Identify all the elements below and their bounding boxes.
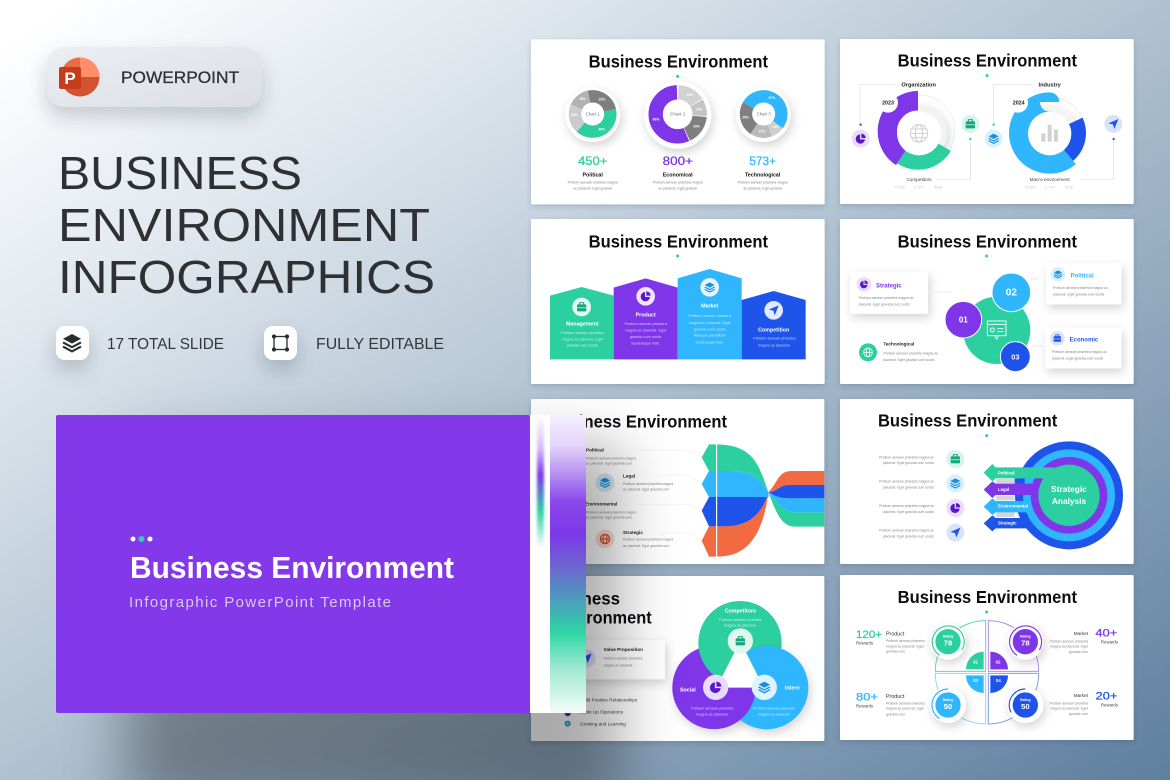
stat: political: 450+ — [578, 154, 607, 168]
stat: 80+ product: 80+ — [856, 692, 878, 704]
diagram: venn circles: Intern — [785, 686, 800, 692]
list: flow labels — [585, 448, 673, 548]
label: competitors: Competitors — [906, 177, 932, 182]
stat: economical — [653, 154, 703, 191]
slide 2: organization and industry donuts — [840, 39, 1134, 204]
donut: organization 2023 — [878, 83, 955, 166]
chart 3 — [736, 87, 791, 142]
rating 78 purple — [1007, 624, 1043, 660]
quadrant wedges: 02 — [996, 660, 1001, 665]
stat: economical: ac placerat. Eget gravida — [658, 187, 697, 191]
stat: 40+ market: Pretium aenean pharetra — [1049, 639, 1088, 643]
quadrant wedges: 04 — [996, 678, 1001, 683]
list: bullets: Scale Up Operations — [580, 709, 624, 714]
slide 1: three donut charts: Business Environment — [589, 51, 768, 71]
stat: economical: Economical — [663, 172, 693, 178]
slide 4: numbered circles with cards — [840, 219, 1134, 384]
rating 78 teal — [930, 624, 966, 660]
donut: industry 2024: Industry — [1039, 83, 1062, 89]
dots — [130, 536, 152, 542]
main heading — [58, 147, 435, 303]
list: flow labels: Pretium aenean pharetra magna — [586, 456, 636, 460]
card: economic: Economic — [1070, 338, 1099, 344]
card: political: placerat. Eget gravida cum sociis — [1053, 293, 1104, 297]
main heading: BUSINESS — [58, 147, 302, 199]
icon: layers — [63, 334, 81, 351]
list: bullets: Growing and Learning — [580, 721, 626, 726]
card: value proposition: Pretium aenean pharetra — [604, 657, 642, 661]
column: product: Product — [636, 313, 656, 319]
chart 2 — [644, 81, 711, 149]
stat: political — [568, 154, 618, 191]
column: product: Pretium aenean pharetra — [624, 322, 668, 326]
icon: globe — [910, 125, 928, 142]
donut: industry 2024 — [1008, 83, 1085, 168]
stat: 40+ market — [1049, 627, 1118, 654]
label: competitors — [894, 177, 942, 189]
stat: 120+ product: magna ac placerat. Eget — [886, 644, 924, 648]
badge: PowerPoint pill — [47, 47, 262, 107]
list: flow labels: ac placerat. Eget gravida cum — [623, 544, 669, 548]
diagram: concentric target — [984, 441, 1123, 549]
stat: technological — [738, 154, 788, 191]
panel: purple cover slide — [56, 415, 530, 713]
card: strategic: Strategic — [876, 284, 902, 290]
column: market: gravida cum sociis — [694, 327, 725, 331]
card: economic — [1045, 328, 1121, 368]
feature: 17 total slide: 17 TOTAL SLIDE — [107, 336, 224, 353]
list: flow labels: ac placerat. Eget gravida cum — [586, 516, 632, 520]
stat: 80+ product — [856, 692, 925, 716]
label: macro-environment: IL 70% — [1045, 185, 1055, 189]
label: competitors: 39.60 — [934, 185, 942, 189]
stat: 20+ market: Pretium aenean pharetra — [1049, 701, 1088, 705]
chart 2: 10% — [696, 108, 703, 112]
column: competition — [742, 291, 806, 359]
donut: organization 2023: 2023 — [882, 101, 894, 107]
list: flow labels: Environmental — [585, 501, 617, 506]
column: market: Market — [701, 304, 718, 310]
icon: briefcase badge — [961, 115, 979, 140]
column: management: magna ac placerat. Eget — [562, 337, 604, 341]
chart 2: 29% — [693, 125, 700, 129]
list: flow labels: Pretium aenean pharetra magna — [623, 482, 673, 486]
stat: 40+ market: magna ac placerat. Eget — [1050, 644, 1088, 648]
column: product: gravida cum sociis — [630, 335, 661, 339]
diagram: venn circles: Pretium aenean pharetra — [719, 618, 762, 622]
item: technological: Pretium aenean pharetra magna ac — [883, 351, 938, 355]
slide 3: house-shaped columns — [531, 219, 825, 384]
column: competition: Pretium aenean pharetra — [753, 336, 796, 340]
stat: technological: 573+ — [749, 154, 776, 168]
rating 50 blue — [930, 687, 966, 723]
label: macro-environment: Macro-environment — [1030, 177, 1070, 182]
column: market: Pretium aenean pharetra — [688, 314, 732, 318]
feature: fully editable: FULLY EDITABLE — [316, 336, 444, 353]
diagram: quadrant frames — [935, 621, 1039, 724]
slide 4: numbered circles with cards: Business Environment — [898, 231, 1077, 251]
slide 2: organization and industry donuts: Business Environment — [898, 51, 1077, 71]
stat: political: ac placerat. Eget gravida — [573, 187, 612, 191]
rating 78 teal: Rating — [943, 635, 953, 639]
chart 3: 15% — [759, 130, 765, 134]
stat: 80+ product: Product — [886, 694, 905, 700]
list: descriptions with icons: Pretium aenean pharetra magna ac — [879, 504, 934, 508]
main heading: INFOGRAPHICS — [58, 251, 435, 303]
slide 6: strategic analysis target: Business Environment — [878, 411, 1058, 431]
rating 78 purple: 78 — [1021, 639, 1030, 648]
icon: PowerPoint logo — [59, 58, 100, 96]
icon: pie badge — [852, 123, 870, 148]
rating 78 teal: 78 — [944, 639, 953, 648]
diagram: central circles: 02 — [1006, 287, 1017, 298]
card: political: Pretium aenean pharetra magna ac — [1053, 286, 1108, 290]
list: bullets: Build Positive Relationships — [580, 698, 638, 703]
slide 8: four-quadrant ratings: Business Environment — [898, 587, 1077, 607]
card: value proposition — [565, 640, 665, 679]
icon: layers badge — [985, 123, 1003, 148]
column: product: Scelerisque felis. — [631, 341, 660, 345]
stat: 80+ product: magna ac placerat. Eget — [886, 707, 924, 711]
label: POWERPOINT: POWERPOINT — [121, 68, 239, 87]
slide 7: three-circle venn — [531, 576, 824, 741]
diagram: concentric target: Legal — [998, 487, 1009, 492]
stat: 20+ market: gravida cum — [1069, 712, 1088, 716]
card: value proposition: Value Proposition — [604, 647, 643, 652]
stat: 120+ product: 120+ — [856, 629, 882, 641]
column: market: magna ac placerat. Eget — [689, 321, 731, 325]
diagram: venn circles: magna ac placerat. — [724, 623, 757, 627]
rating 50 indigo — [1007, 687, 1043, 723]
card: economic: Pretium aenean pharetra magna ac — [1052, 350, 1107, 354]
column: management: gravida cum sociis — [567, 344, 598, 348]
list: descriptions with icons: placerat. Eget gravida cum sociis — [883, 535, 934, 539]
chart 1: Chart 1 — [586, 111, 600, 116]
icon: bounding box — [272, 335, 289, 351]
main heading: ENVIRONMENT — [58, 199, 430, 251]
card: economic: placerat. Eget gravida cum sociis — [1052, 357, 1103, 361]
column: market — [678, 269, 742, 359]
stat: 40+ market: 40+ — [1095, 627, 1117, 639]
list: flow labels: Pretium aenean pharetra magna — [586, 510, 636, 514]
column: product — [614, 278, 678, 359]
chart 1: 29% — [599, 98, 605, 102]
slide 8: four-quadrant ratings — [840, 575, 1134, 740]
cover title: Business Environment — [130, 550, 454, 585]
stat: political: Political — [582, 172, 603, 178]
stat: 20+ market: Rewards — [1101, 702, 1118, 707]
label: macro-environment — [1025, 177, 1073, 189]
slide 6: strategic analysis target — [840, 399, 1134, 564]
feature: fully editable — [264, 326, 444, 360]
diagram: venn circles: Pretium aenean pharetra — [753, 707, 796, 711]
list: descriptions with icons: Pretium aenean pharetra magna ac — [879, 480, 934, 484]
stat: 120+ product: gravida cum — [886, 650, 905, 654]
label: competitors: IL 70% — [914, 185, 924, 189]
chart 2: 15% — [687, 93, 693, 97]
stat: 20+ market: Market — [1074, 693, 1089, 698]
chart 3: 57% — [769, 96, 775, 100]
stat: 80+ product: Rewards — [856, 703, 873, 708]
card: strategic: placerat. Eget gravida cum sociis — [859, 303, 910, 307]
diagram: concentric target: Strategic — [1051, 484, 1087, 494]
diagram: venn circles: Pretium aenean pharetra — [691, 707, 734, 711]
chart 2: Chart 2 — [670, 112, 686, 117]
stat: 20+ market — [1049, 690, 1118, 716]
stat: 120+ product: Rewards — [856, 641, 873, 646]
stat: technological: ac placerat. Eget gravida — [743, 187, 782, 191]
rating 50 indigo: Rating — [1020, 698, 1031, 702]
diagram: venn circles: magna ac placerat. — [696, 713, 729, 717]
card: value proposition: magna ac placerat. — [604, 663, 633, 667]
stat: political: Pretium aenean pharetra magna — [568, 181, 618, 185]
icon: bar chart — [1041, 125, 1058, 142]
slide 7: three-circle venn: Business — [545, 588, 620, 608]
chart 3: 25% — [742, 116, 749, 120]
list: flow labels: Political — [586, 448, 604, 453]
diagram: venn circles: magna ac placerat. — [758, 713, 790, 717]
chart: converging flow — [702, 444, 824, 557]
donut: industry 2024: 2024 — [1013, 101, 1025, 107]
stat: 20+ market: magna ac placerat. Eget — [1050, 707, 1088, 711]
diagram: venn circles: Social — [680, 687, 696, 693]
slide 5: sankey flow: Business Environment — [548, 411, 727, 431]
diagram: central circles: 01 — [959, 315, 968, 324]
list: flow labels: Pretium aenean pharetra magna — [623, 538, 673, 542]
column: management: Management — [566, 322, 599, 328]
chart 1: 20% — [571, 113, 578, 117]
stat: 80+ product: gravida cum — [886, 712, 905, 716]
column: competition: magna ac placerat. — [758, 343, 791, 347]
quadrant wedges: 03 — [973, 678, 979, 683]
stat: economical: 800+ — [663, 154, 693, 168]
stat: 40+ market: gravida cum — [1069, 650, 1088, 654]
diagram: venn circles — [672, 601, 808, 729]
column: market: Scelerisque felis. — [695, 340, 724, 344]
stat: technological: Pretium aenean pharetra magna — [738, 181, 788, 185]
chart 3: 10% — [772, 125, 779, 129]
label: macro-environment: TI 26% — [1025, 185, 1036, 189]
list: bullets — [565, 698, 638, 727]
list: descriptions with icons: Pretium aenean pharetra magna ac — [879, 455, 934, 459]
diagram: central circles: 03 — [1011, 352, 1019, 361]
donut: organization 2023: Organization — [901, 83, 936, 89]
chart 2: 60% — [653, 118, 659, 122]
item: technological: Technological — [883, 342, 914, 347]
card: political: Political — [1071, 274, 1094, 280]
chart 1 — [565, 87, 620, 142]
glass strip with gradient — [530, 415, 586, 713]
list: descriptions with icons: placerat. Eget gravida cum sociis — [883, 485, 934, 489]
item: technological — [859, 342, 938, 362]
quadrant wedges: 01 — [973, 660, 979, 665]
column: management — [550, 287, 614, 359]
rating 50 blue: 50 — [944, 702, 952, 711]
diagram: central circles — [945, 273, 1031, 372]
feature: 17 total slide — [56, 326, 224, 360]
slide 7: three-circle venn: Environment — [552, 608, 652, 628]
stat: 40+ market: Market — [1074, 631, 1089, 636]
label: macro-environment: 39.50 — [1065, 185, 1073, 189]
diagram: concentric target: Environmental — [998, 504, 1028, 509]
slide 3: house-shaped columns: Business Environment — [589, 231, 768, 251]
list: descriptions with icons: Pretium aenean pharetra magna ac — [879, 529, 934, 533]
item: technological: placerat. Eget gravida cum sociis — [883, 358, 935, 362]
chart 3: Chart 3 — [757, 111, 771, 116]
slide 1: three donut charts — [531, 39, 825, 204]
stat: 20+ market: 20+ — [1096, 690, 1117, 702]
stat: economical: Pretium aenean pharetra magna — [653, 181, 703, 185]
list: descriptions with icons: placerat. Eget gravida cum sociis — [883, 461, 934, 465]
icon: PowerPoint logo: P — [64, 69, 76, 88]
list: descriptions with icons — [879, 450, 964, 542]
list: flow labels: Legal — [623, 473, 635, 478]
column: competition: Competition — [758, 328, 789, 334]
cover subtitle: Infographic PowerPoint Template — [129, 594, 391, 611]
stat: 40+ market: Rewards — [1101, 640, 1118, 645]
column: market: Natoque penatibus — [694, 334, 726, 338]
diagram: concentric target: Political — [998, 470, 1015, 475]
card: strategic — [850, 272, 928, 314]
label: competitors: TI 26% — [894, 185, 905, 189]
diagram: concentric target: Strategic — [998, 520, 1017, 525]
diagram: venn circles: Competitors — [725, 608, 756, 614]
list: flow labels: ac placerat. Eget gravida cum — [586, 461, 632, 465]
quadrant wedges — [966, 652, 1008, 693]
stat: 80+ product: Pretium aenean pharetra — [886, 701, 925, 705]
column: management: Pretium aenean pharetra — [561, 331, 604, 335]
list: flow labels: Strategic — [623, 530, 643, 535]
list: flow labels: ac placerat. Eget gravida cum — [623, 488, 669, 492]
diagram: concentric target: Analysis — [1052, 496, 1086, 506]
card: political — [1046, 263, 1121, 304]
rating 50 blue: Rating — [943, 698, 953, 702]
icon: presentation board — [987, 321, 1006, 339]
stat: 120+ product: Product — [886, 631, 905, 637]
rating 78 purple: Rating — [1020, 635, 1031, 639]
stat: 120+ product — [856, 629, 925, 654]
slide 5: sankey flow — [531, 399, 824, 564]
chart 1: 40% — [598, 128, 605, 132]
column: product: magna ac placerat. Eget — [625, 328, 667, 332]
chart 1: 15% — [579, 97, 586, 101]
card: strategic: Pretium aenean pharetra magna ac — [859, 296, 914, 300]
stat: 120+ product: Pretium aenean pharetra — [886, 639, 925, 643]
stat: technological: Technological — [745, 172, 781, 178]
list: descriptions with icons: placerat. Eget gravida cum sociis — [883, 510, 934, 514]
rating 50 indigo: 50 — [1021, 702, 1030, 711]
icon: arrow badge — [1104, 115, 1122, 140]
